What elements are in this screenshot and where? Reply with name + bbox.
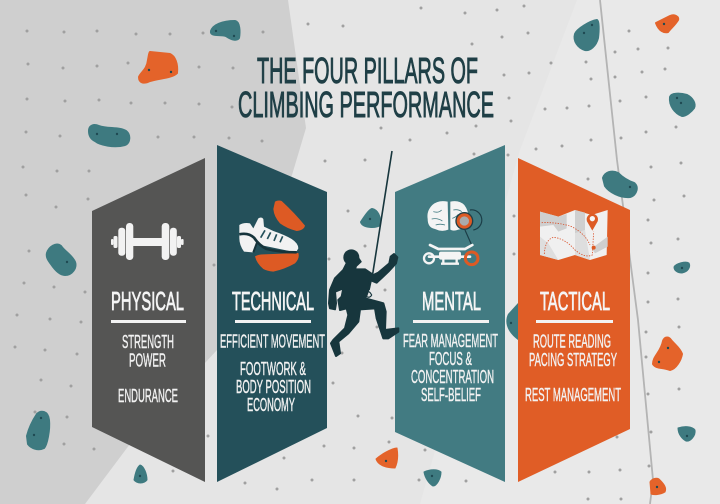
list: tactical: PACING STRATEGY [529, 350, 617, 370]
icon: climber silhouette [329, 249, 398, 356]
divider rule: tactical [536, 320, 613, 323]
divider rule: mental [413, 320, 489, 323]
list: mental: FEAR MANAGEMENT [403, 331, 498, 351]
icon: brain and mechanism [424, 201, 482, 265]
heading: mental: MENTAL [422, 286, 481, 316]
panel: technical [217, 145, 327, 482]
panel: mental [395, 145, 505, 482]
icon: dumbbell [111, 223, 184, 260]
panel: physical [92, 158, 205, 482]
list: mental [403, 331, 498, 405]
title: THE FOUR PILLARS OF [257, 50, 478, 91]
heading: physical: PHYSICAL [111, 286, 184, 316]
list: physical [118, 332, 178, 406]
list: technical: EFFICIENT MOVEMENT [220, 332, 325, 352]
list: technical: BODY POSITION [236, 377, 311, 397]
list: physical: ENDURANCE [118, 386, 178, 406]
list: tactical: ROUTE READING [533, 332, 611, 352]
list: technical: FOOTWORK & [240, 359, 306, 379]
icon: climbing shoe on holds [239, 200, 305, 272]
panel: tactical [518, 158, 630, 482]
list: physical: POWER [129, 350, 166, 370]
title: CLIMBING PERFORMANCE [238, 84, 494, 125]
list: mental: CONCENTRATION [411, 367, 494, 387]
list: mental: SELF-BELIEF [421, 385, 481, 405]
list: technical: ECONOMY [247, 395, 295, 415]
title [238, 50, 494, 125]
icon: route map [540, 210, 608, 260]
heading: tactical: TACTICAL [540, 286, 610, 316]
list: tactical: REST MANAGEMENT [525, 385, 621, 405]
divider rule: technical [235, 320, 311, 323]
list: mental: FOCUS & [429, 349, 472, 369]
divider rule: physical [111, 320, 186, 323]
list: technical [220, 332, 325, 415]
rope to climber [369, 151, 392, 290]
list: physical: STRENGTH [122, 332, 174, 352]
heading: technical: TECHNICAL [232, 286, 314, 316]
list: tactical [525, 332, 621, 405]
